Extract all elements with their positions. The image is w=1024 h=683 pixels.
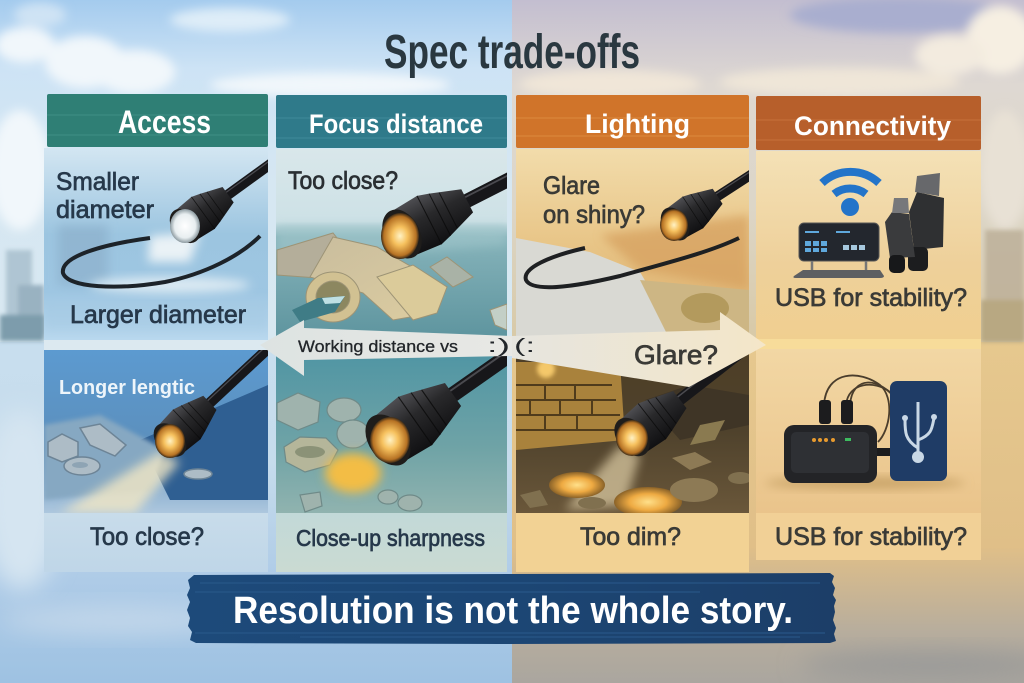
arrow: left working distance: :) <box>487 336 510 357</box>
header: focus distance <box>276 95 507 148</box>
text: smaller diameter <box>56 168 154 224</box>
banner: takeaway: Resolution is not the whole story. <box>233 590 793 632</box>
cell: too dim <box>516 354 749 513</box>
text: glare on shiny: on shiny? <box>543 201 645 229</box>
icon: router <box>793 223 884 278</box>
panel: access <box>44 94 268 572</box>
title: Spec trade-offs <box>384 26 640 79</box>
icon: usb plugs <box>885 173 944 273</box>
arrow: right glare: (: <box>514 336 535 357</box>
cell: wifi and usb upper <box>756 151 981 349</box>
icon: probe <box>382 172 507 258</box>
icon: cables <box>824 375 898 442</box>
header: access <box>47 94 268 147</box>
text: longer length: Longer lengtic <box>59 377 195 399</box>
cell: longer length <box>44 350 268 513</box>
icon: lit nuts <box>520 452 752 517</box>
header: connectivity: Connectivity <box>794 111 951 141</box>
header: focus distance: Focus distance <box>309 109 483 139</box>
icon: probe <box>365 356 507 466</box>
arrow: left working distance <box>260 320 512 376</box>
cell: too close <box>276 149 507 336</box>
header: lighting <box>516 95 749 148</box>
text: too dim: Too dim? <box>580 523 681 551</box>
text: smaller diameter: diameter <box>56 196 154 224</box>
panel: focus distance <box>276 95 507 572</box>
arrow: right glare <box>512 312 766 387</box>
text: close-up sharpness: Close-up sharpness <box>296 525 485 551</box>
icon: probe <box>660 170 749 240</box>
cell: glare on shiny <box>516 149 749 336</box>
cell: smaller and larger diameter <box>44 148 268 340</box>
icon: probe <box>614 357 744 456</box>
arrow: right glare: Glare? <box>634 340 718 370</box>
icon: usb drive <box>890 381 947 481</box>
icon: probe <box>170 159 268 244</box>
cell: usb device lower <box>756 349 981 513</box>
icon: thin cable <box>526 238 739 287</box>
text: usb for stability: USB for stability? <box>775 284 967 312</box>
cell: close-up sharpness <box>276 356 507 513</box>
arrow: left working distance: Working distance vs <box>298 337 458 356</box>
text: smaller diameter: Smaller <box>56 168 139 196</box>
panel: lighting <box>516 95 749 572</box>
text: glare on shiny <box>543 172 645 229</box>
header: connectivity <box>756 96 981 150</box>
text: too close: Too close? <box>288 167 398 195</box>
text: larger diameter: Larger diameter <box>70 301 246 329</box>
icon: probe <box>154 350 268 457</box>
text: glare on shiny: Glare <box>543 172 600 200</box>
panel: connectivity <box>756 96 981 560</box>
icon: shiny metal sheet <box>516 238 666 336</box>
banner: takeaway <box>187 573 836 644</box>
header: access: Access <box>118 104 211 140</box>
header: lighting: Lighting <box>585 109 690 139</box>
text: usb for stability: USB for stability? <box>775 523 967 551</box>
icon: brick wall <box>516 362 625 450</box>
text: too close: Too close? <box>90 523 204 551</box>
icon: metal fittings <box>277 233 507 330</box>
icon: black hub <box>784 400 891 483</box>
icon: wifi <box>822 172 879 212</box>
icon: thin cable <box>63 236 260 287</box>
